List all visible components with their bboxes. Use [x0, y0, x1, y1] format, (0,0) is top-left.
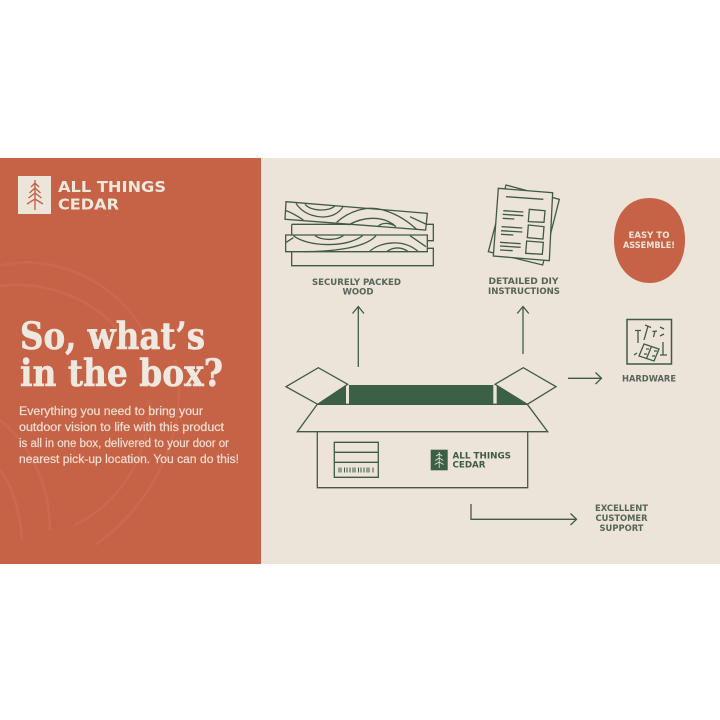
badge: easy to assemble: EASY TO	[628, 231, 670, 241]
heading	[20, 314, 223, 395]
body text: Everything you need to bring your	[19, 406, 203, 418]
logo: All Things Cedar	[18, 176, 166, 214]
logo: All Things Cedar: CEDAR	[58, 196, 119, 214]
label: securely packed wood	[312, 278, 401, 298]
body text: nearest pick-up location. You can do this!	[19, 454, 239, 466]
label: excellent customer support	[595, 504, 648, 534]
box logo: CEDAR	[452, 460, 486, 470]
label: hardware: HARDWARE	[622, 374, 676, 384]
panel: right cream background	[261, 158, 720, 564]
logo: All Things Cedar: ALL THINGS	[58, 178, 166, 196]
badge: easy to assemble: ASSEMBLE!	[623, 241, 675, 251]
box logo: ALL THINGS	[452, 452, 511, 462]
label: detailed DIY instructions	[488, 277, 560, 297]
body text	[19, 406, 239, 466]
box logo	[431, 450, 511, 470]
body text: is all in one box, delivered to your door or	[19, 438, 229, 450]
label: excellent customer support: EXCELLENT	[595, 504, 648, 514]
badge: easy to assemble	[614, 198, 685, 283]
arrow: up to instructions	[517, 306, 529, 354]
label: securely packed wood: WOOD	[342, 288, 374, 298]
heading: in the box?	[20, 351, 223, 395]
box lid and body	[297, 404, 548, 488]
illustration: open box	[286, 368, 556, 488]
box interior	[318, 385, 526, 404]
icon: instruction sheets	[488, 185, 559, 265]
icon: wood planks	[285, 202, 433, 266]
panel: left terracotta	[0, 158, 261, 564]
label: detailed DIY instructions: INSTRUCTIONS	[488, 287, 560, 297]
label: excellent customer support: SUPPORT	[600, 524, 644, 534]
body text: outdoor vision to life with this product	[19, 422, 225, 434]
heading: So, what’s	[20, 314, 205, 358]
label: securely packed wood: SECURELY PACKED	[312, 278, 401, 288]
shipping label with barcode	[334, 442, 378, 477]
icon: hardware	[627, 320, 672, 364]
arrow: right to hardware	[568, 372, 602, 384]
arrow: to customer support	[471, 504, 576, 525]
arrow: up to wood	[352, 306, 364, 367]
label: detailed DIY instructions: DETAILED DIY	[488, 277, 559, 287]
label: excellent customer support: CUSTOMER	[596, 514, 648, 524]
box flaps	[286, 368, 556, 404]
